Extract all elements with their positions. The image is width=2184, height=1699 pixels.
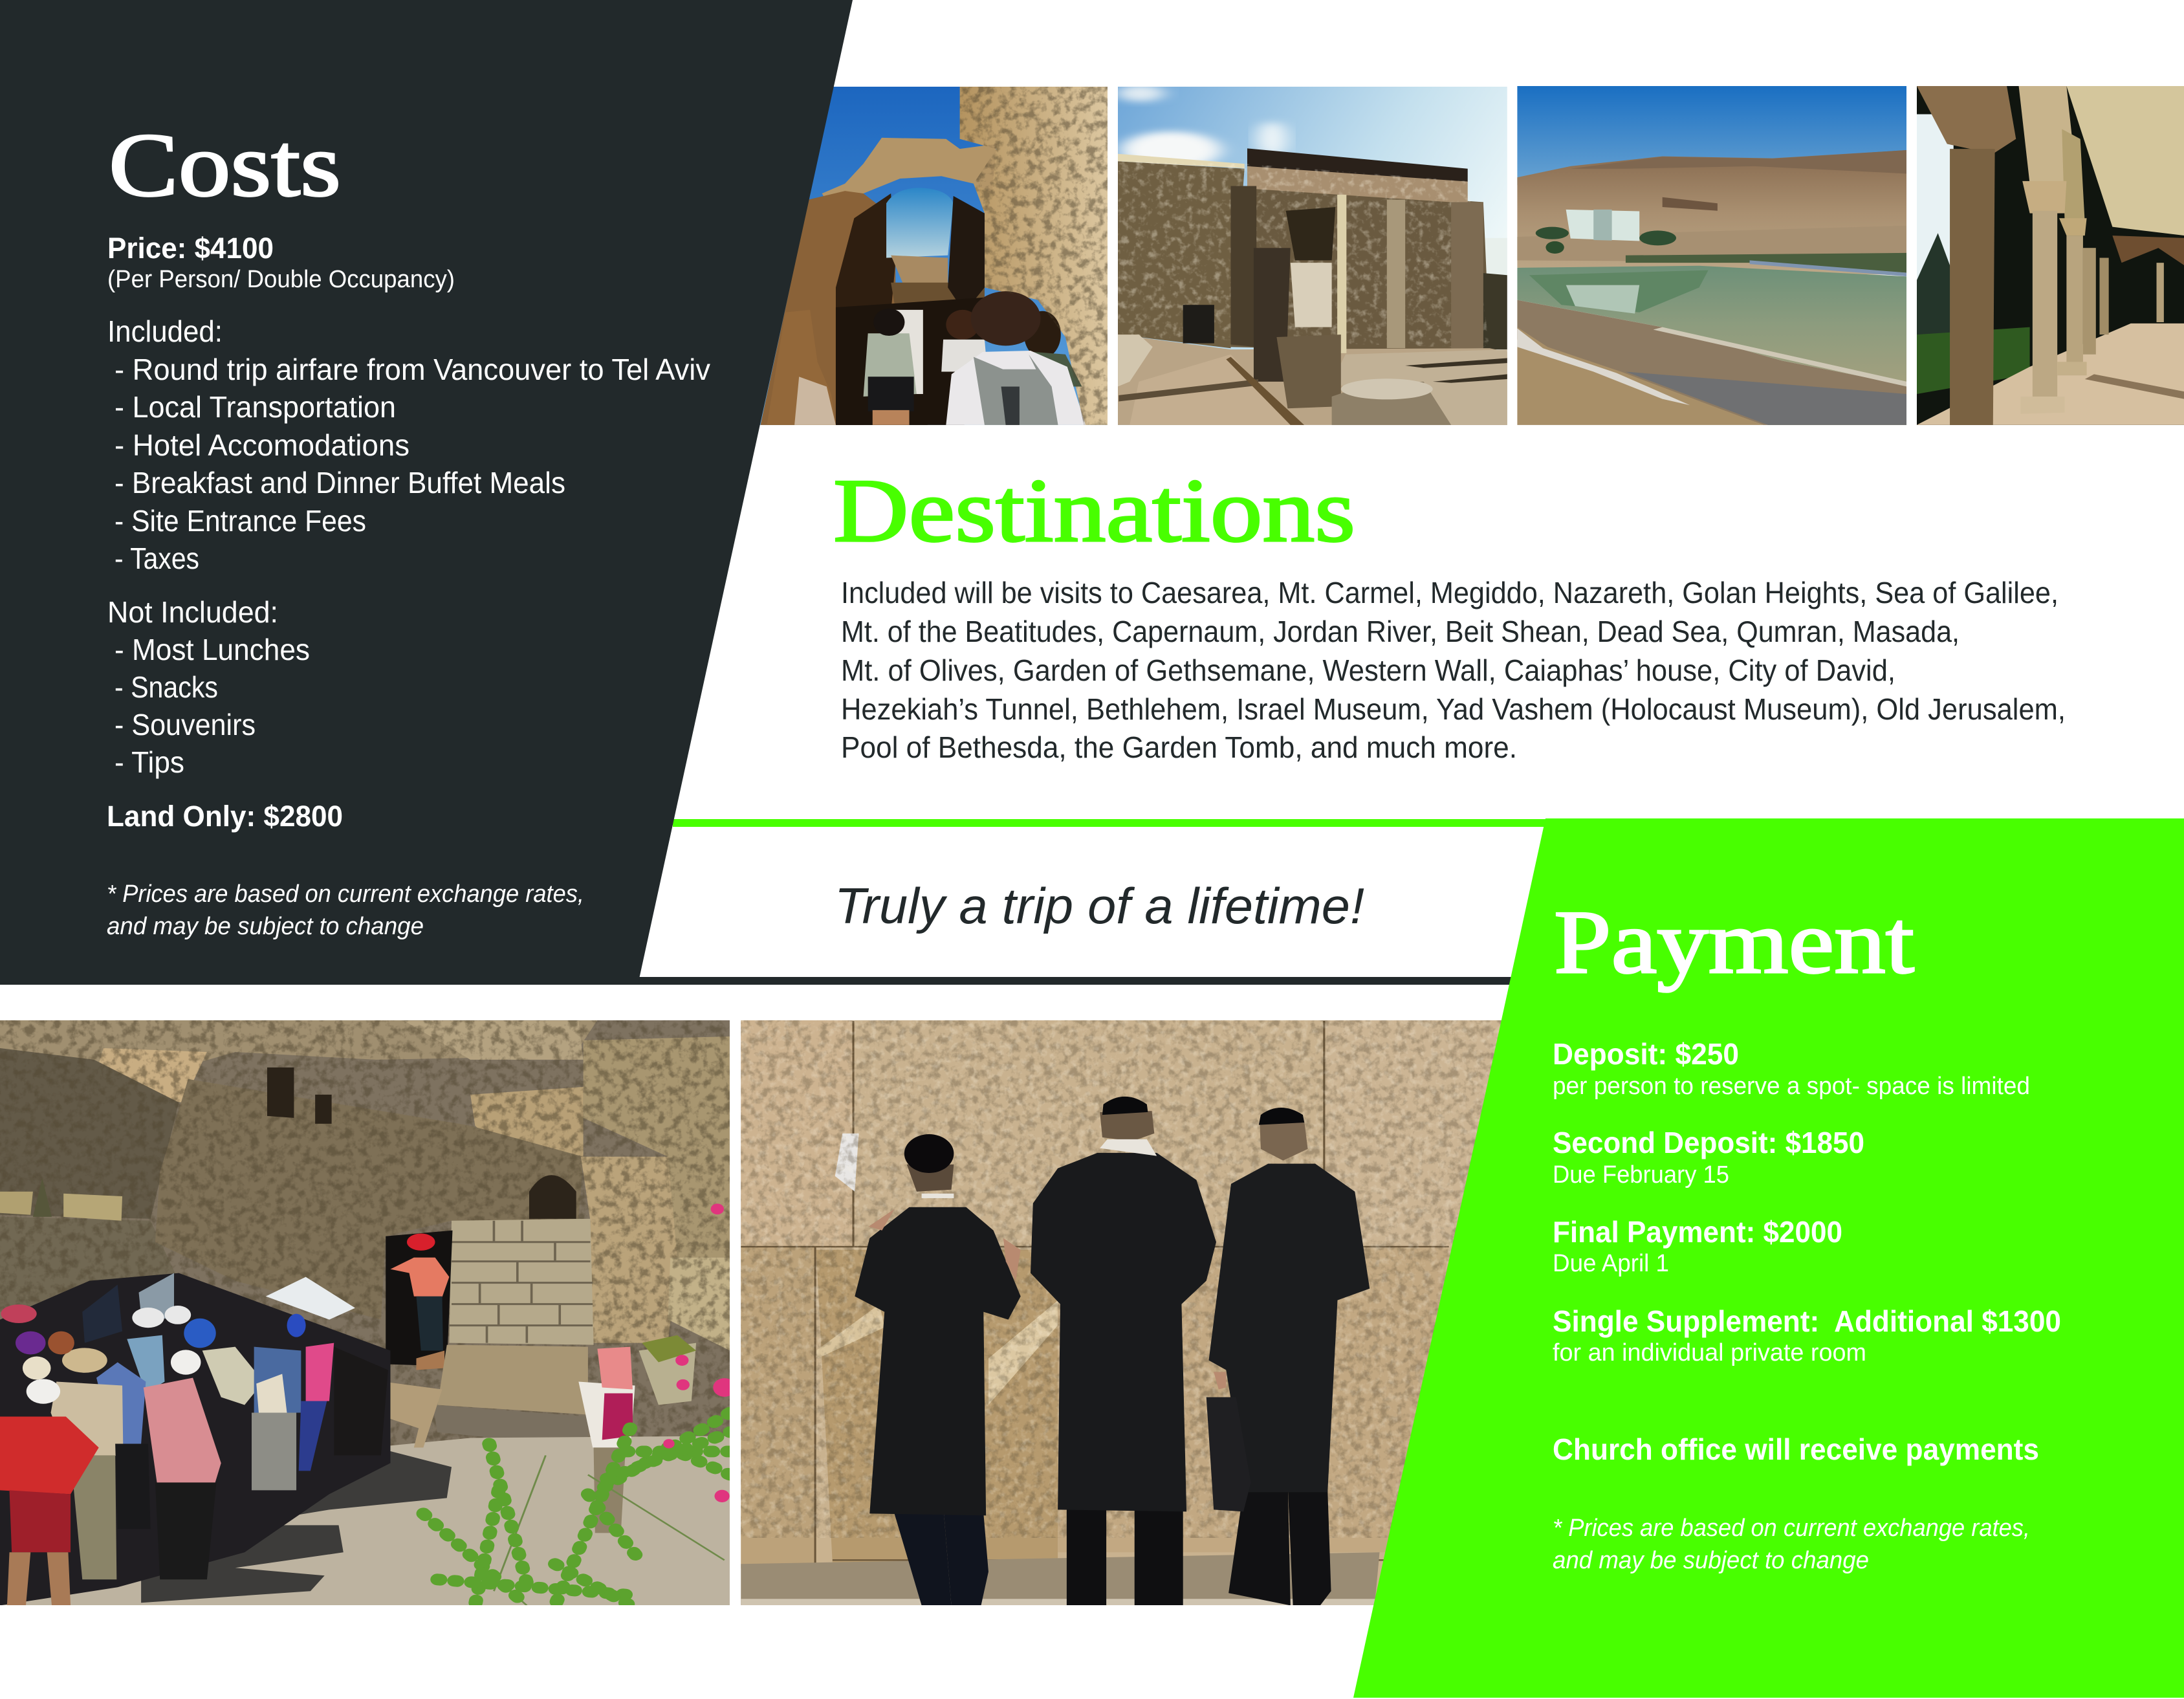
photo: Dead Sea shoreline — [1517, 86, 1906, 425]
second deposit: Second Deposit: $1850 — [1553, 1126, 1864, 1159]
not included list — [107, 595, 310, 779]
photo: Garden Tomb crowd — [0, 1020, 736, 1606]
included list: - Site Entrance Fees — [115, 504, 366, 538]
final payment — [1553, 1215, 1842, 1277]
destinations paragraph: Included will be visits to Caesarea, Mt. Carmel, Megiddo, Nazareth, Golan Heights, Sea of Galilee, — [841, 576, 2058, 609]
land only price: Land Only: $2800 — [107, 800, 343, 833]
exchange rate note: * Prices are based on current exchange rates, — [107, 881, 584, 908]
price: (Per Person/ Double Occupancy) — [107, 266, 455, 293]
exchange rate note — [1553, 1515, 2030, 1574]
not included list: - Most Lunches — [115, 633, 310, 666]
price — [107, 232, 455, 293]
not included list: Not Included: — [107, 595, 278, 629]
panel: payment — [1353, 818, 2184, 1698]
exchange rate note: * Prices are based on current exchange rates, — [1553, 1515, 2030, 1542]
exchange rate note: and may be subject to change — [107, 913, 424, 940]
exchange rate note — [107, 881, 584, 940]
panel: trip tagline banner — [637, 819, 1553, 985]
heading: destinations: Destinations — [833, 461, 1355, 561]
tagline text: Truly a trip of a lifetime! — [835, 877, 1364, 934]
church office note: Church office will receive payments — [1553, 1432, 2039, 1466]
included list: - Hotel Accomodations — [115, 428, 410, 462]
panel: destinations — [833, 461, 2066, 764]
included list: - Taxes — [115, 542, 199, 575]
deposit — [1553, 1037, 2030, 1100]
heading: costs: Costs — [109, 115, 341, 215]
final payment: Final Payment: $2000 — [1553, 1215, 1842, 1249]
not included list: - Snacks — [115, 670, 218, 704]
destinations paragraph: Mt. of the Beatitudes, Capernaum, Jordan River, Beit Shean, Dead Sea, Qumran, Masada, — [841, 615, 1960, 648]
destinations paragraph: Hezekiah’s Tunnel, Bethlehem, Israel Museum, Yad Vashem (Holocaust Museum), Old Jerusalem, — [841, 692, 2066, 726]
included list: - Local Transportation — [115, 390, 396, 424]
heading: payment: Payment — [1554, 892, 1914, 992]
photo: stone archway with visitors — [744, 87, 1108, 425]
photo: synagogue ruins — [1117, 85, 1507, 425]
final payment: Due April 1 — [1553, 1250, 1669, 1277]
single supplement: for an individual private room — [1553, 1339, 1866, 1366]
price: Price: $4100 — [107, 232, 274, 265]
not included list: - Tips — [115, 745, 184, 779]
exchange rate note: and may be subject to change — [1553, 1547, 1869, 1574]
included list — [107, 314, 710, 575]
deposit: Deposit: $250 — [1553, 1037, 1739, 1071]
single supplement: Single Supplement: Additional $1300 — [1553, 1304, 2061, 1338]
destinations paragraph — [841, 576, 2066, 764]
not included list: - Souvenirs — [115, 708, 256, 741]
included list: Included: — [107, 314, 223, 348]
single supplement — [1553, 1304, 2061, 1366]
photo: men praying at the Western Wall — [741, 1020, 1517, 1606]
destinations paragraph: Pool of Bethesda, the Garden Tomb, and much more. — [841, 730, 1517, 764]
destinations paragraph: Mt. of Olives, Garden of Gethsemane, Western Wall, Caiaphas’ house, City of David, — [841, 653, 1895, 687]
included list: - Round trip airfare from Vancouver to Tel Aviv — [115, 353, 710, 386]
second deposit — [1553, 1126, 1864, 1189]
deposit: per person to reserve a spot- space is limited — [1553, 1073, 2030, 1100]
second deposit: Due February 15 — [1553, 1161, 1729, 1189]
photo: colonnade walkway — [1917, 86, 2184, 425]
panel: costs — [0, 0, 853, 985]
included list: - Breakfast and Dinner Buffet Meals — [115, 466, 565, 499]
